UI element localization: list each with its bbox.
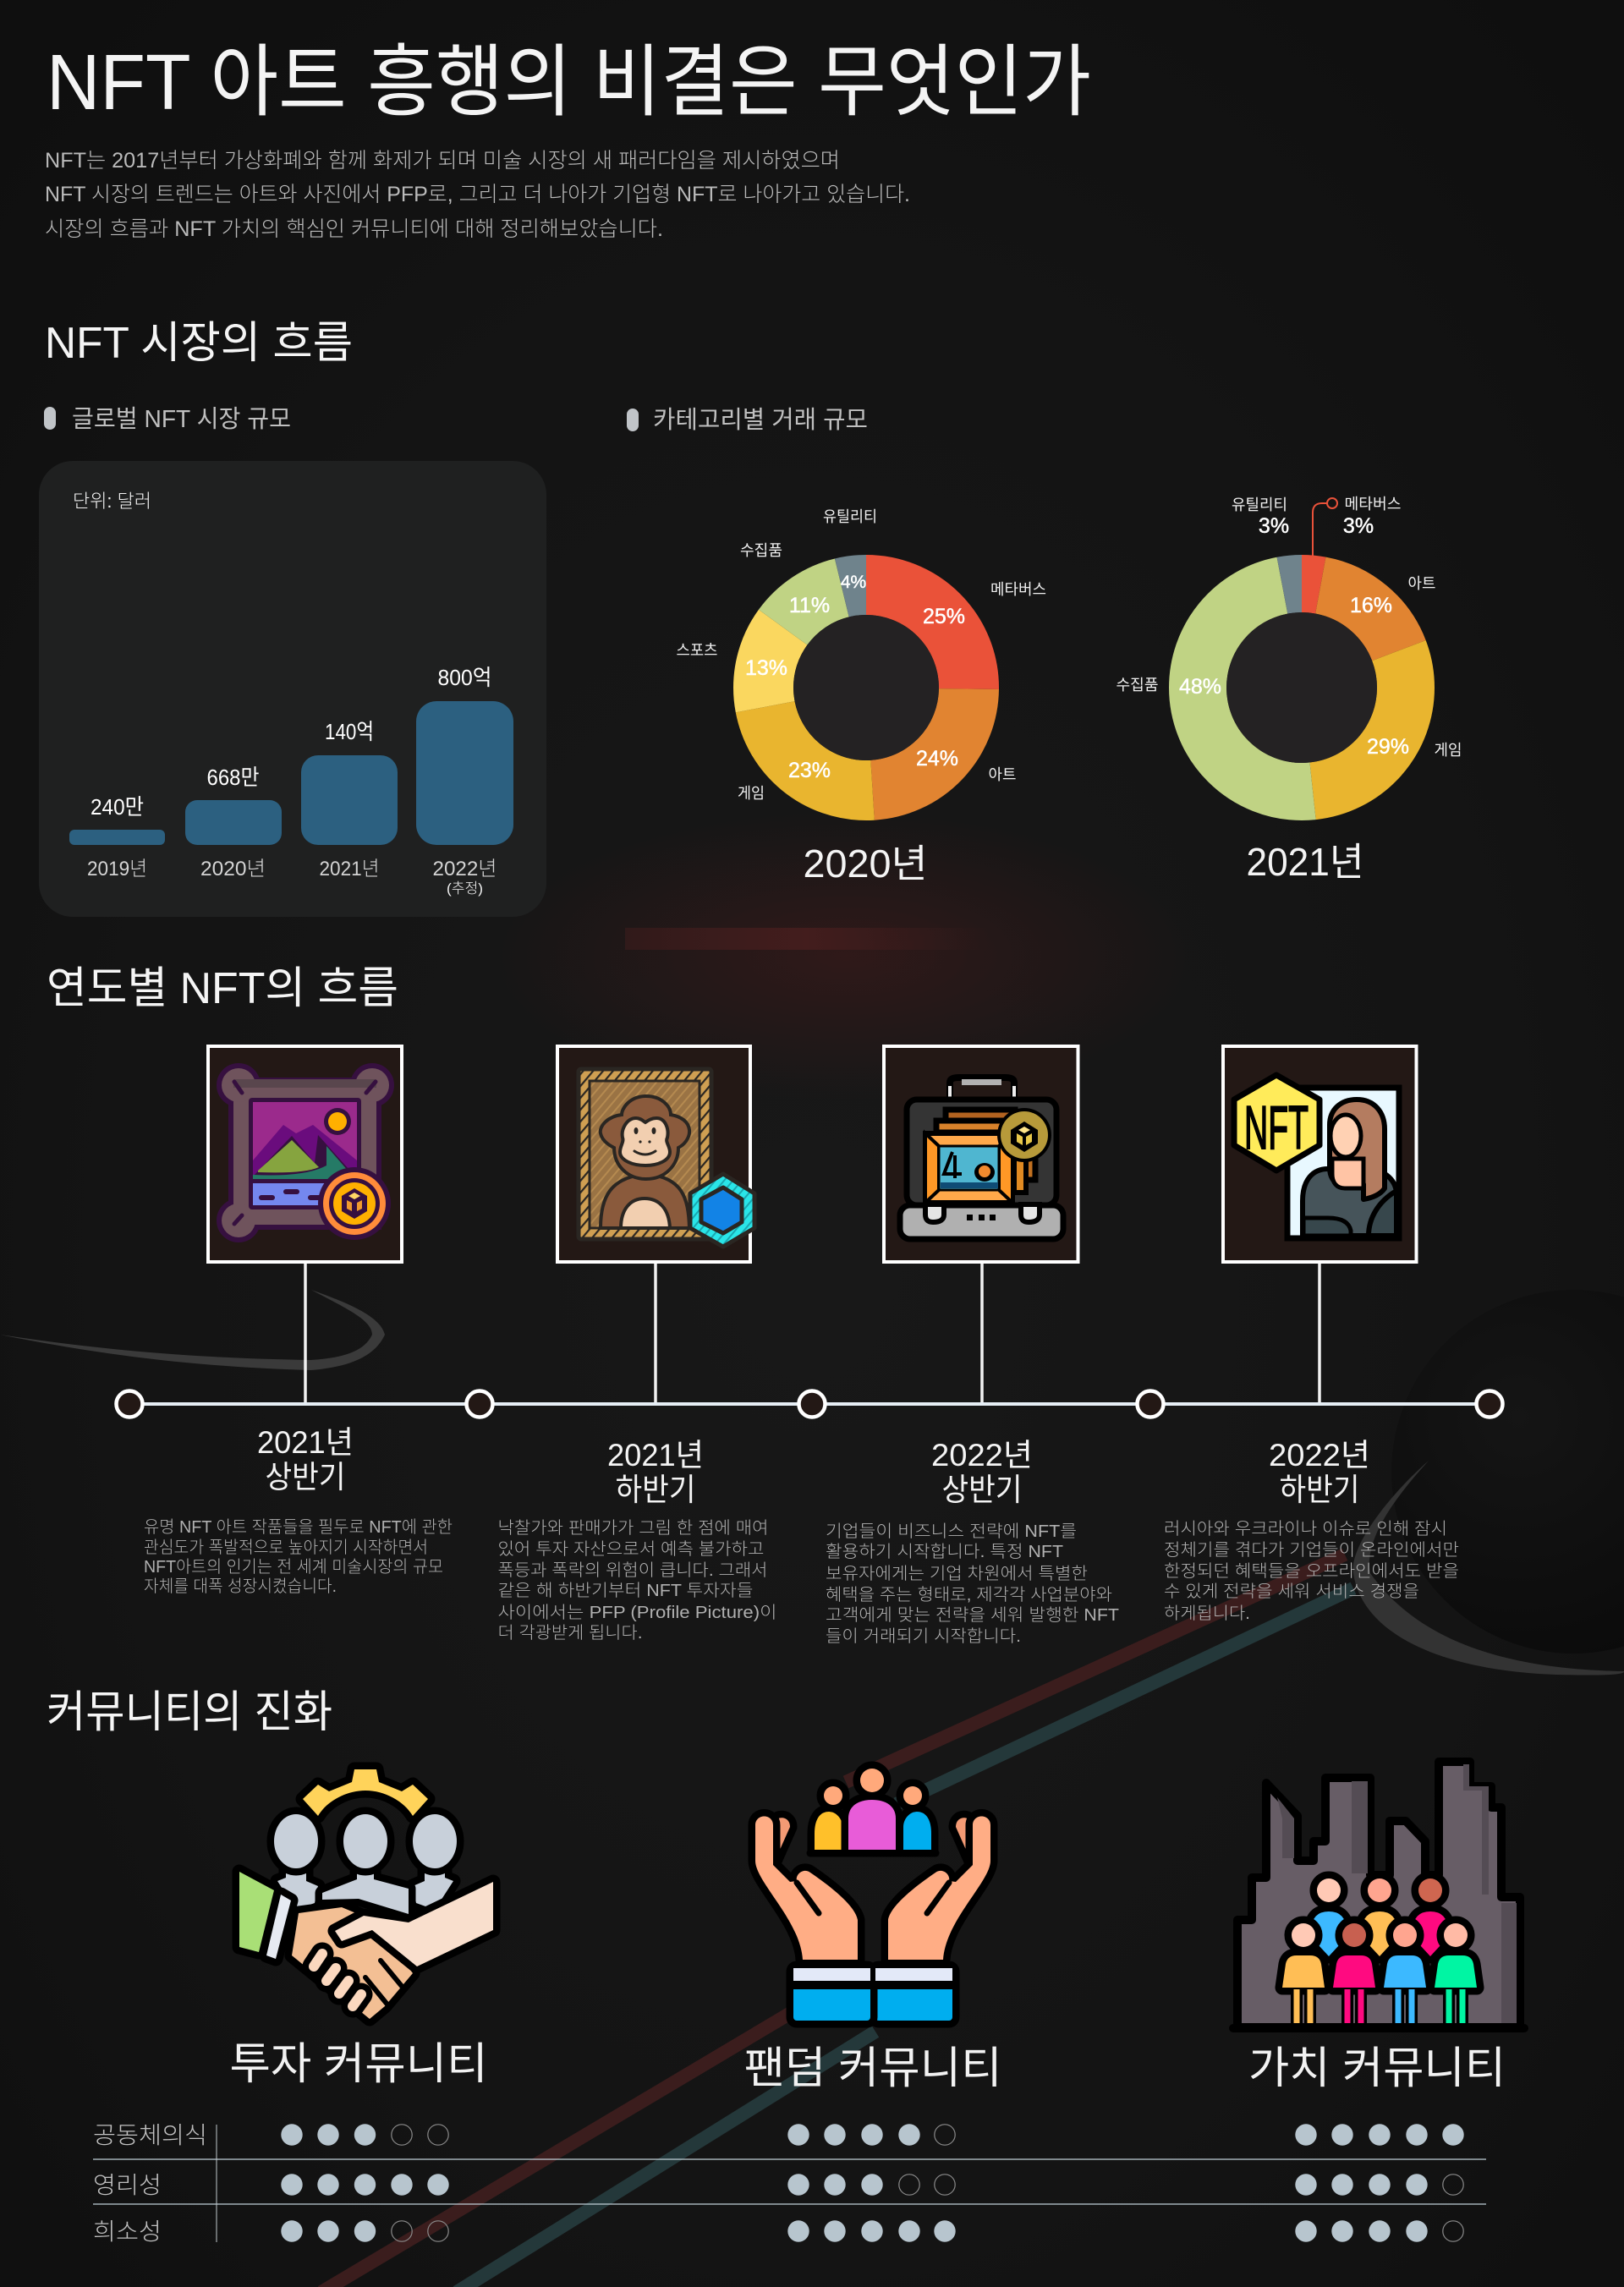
- intro paragraph: [45, 149, 910, 241]
- intro paragraph: NFT는 2017년부터 가상화폐와 함께 화제가 되며 미술 시장의 새 패러다임을 제시하였으며: [45, 149, 840, 173]
- donut chart: 2021: 수집품: [1116, 677, 1159, 694]
- donut chart: 2020: [677, 508, 1046, 886]
- timeline text: 2021 second half: 있어 투자 자산으로서 예측 불가하고: [497, 1539, 765, 1559]
- timeline text: 2021 second half: 낙찰가와 판매가가 그림 한 점에 매여: [497, 1518, 768, 1538]
- metaverse leader line: [1313, 498, 1337, 556]
- donut chart: 2021: 아트: [1407, 575, 1436, 592]
- timeline text: 2022 second half: 정체기를 겪다가 기업들이 온라인에서만: [1164, 1540, 1459, 1560]
- donut chart: 2020: 4%: [841, 573, 866, 592]
- timeline text: 2021 first half: 관심도가 폭발적으로 높아지기 시작하면서: [144, 1538, 428, 1557]
- icon: framed landscape NFT with coin: [208, 1046, 402, 1262]
- timeline text: 2022 second half: 러시아와 우크라이나 이슈로 인해 잠시: [1164, 1519, 1447, 1538]
- timeline text: 2022 first half: 활용하기 시작합니다. 특정 NFT: [826, 1542, 1063, 1561]
- timeline text: 2022 second half: 수 있게 전략을 세워 서비스 경쟁을: [1164, 1582, 1419, 1601]
- timeline text: 2021 second half: 폭등과 폭락의 위험이 큽니다. 그래서: [497, 1560, 768, 1580]
- timeline text: 2022 first half: 보유자에게는 기업 차원에서 특별한: [826, 1564, 1088, 1583]
- donut chart: 2020: 스포츠: [677, 642, 717, 659]
- comparison table: [93, 2122, 1486, 2245]
- rating dots: filled: [281, 2124, 1464, 2242]
- timeline text: 2021 second half: 하반기: [616, 1473, 695, 1507]
- donut chart: 2021: 29%: [1367, 735, 1409, 759]
- icon: briefcase with NFT art: [884, 1046, 1078, 1262]
- donut chart: 2021: [1116, 496, 1462, 884]
- timeline text: 2021 second half: [497, 1438, 776, 1643]
- donut chart: 2020: 메타버스: [990, 581, 1046, 598]
- timeline text: 2021 first half: 자체를 대폭 성장시켰습니다.: [144, 1577, 337, 1596]
- label: investment community: 투자 커뮤니티: [230, 2040, 487, 2089]
- timeline line and nodes: [117, 1264, 1502, 1418]
- heading: NFT market flow: NFT 시장의 흐름: [45, 319, 353, 368]
- comparison table: 공동체의식: [93, 2122, 207, 2148]
- title: NFT 아트 흥행의 비결은 무엇인가: [47, 38, 1091, 126]
- panel: bar chart of market size: 2020년: [200, 858, 266, 880]
- rating dots: empty: [392, 2125, 1463, 2241]
- timeline text: 2022 first half: 2022년: [931, 1438, 1033, 1473]
- panel: bar chart of market size: 2019년: [87, 858, 147, 880]
- label: value community: 가치 커뮤니티: [1248, 2044, 1506, 2093]
- panel: bar chart of market size: 140억: [325, 719, 374, 744]
- panel: bar chart of market size: 2021년: [320, 858, 379, 880]
- donut chart: 2021: 게임: [1435, 742, 1462, 759]
- donut chart: 2020: 23%: [788, 759, 831, 782]
- subheading: transactions by category: 카테고리별 거래 규모: [653, 407, 868, 434]
- timeline text: 2021 second half: 사이에서는 PFP (Profile Picture)이: [497, 1603, 776, 1622]
- intro paragraph: NFT 시장의 트렌드는 아트와 사진에서 PFP로, 그리고 더 나아가 기업형 NFT로 나아가고 있습니다.: [45, 183, 910, 206]
- donut chart: 2020: 11%: [789, 594, 830, 617]
- timeline text: 2022 first half: 고객에게 맞는 전략을 세워 발행한 NFT: [826, 1605, 1119, 1625]
- donut chart: 2021: 48%: [1179, 675, 1221, 699]
- timeline text: 2022 first half: [826, 1438, 1119, 1646]
- timeline text: 2021 second half: 같은 해 하반기부터 NFT 투자자들: [497, 1581, 753, 1600]
- heading: yearly NFT flow: 연도별 NFT의 흐름: [47, 964, 398, 1013]
- donut chart: 2021: 유틸리티: [1232, 496, 1287, 513]
- donut chart: 2021: 3%: [1259, 514, 1289, 538]
- panel: bar chart of market size: 240만: [91, 794, 144, 820]
- panel: bar chart of market size: 668만: [206, 765, 259, 790]
- timeline text: 2021 first half: 유명 NFT 아트 작품들을 필두로 NFT에 관한: [144, 1517, 453, 1537]
- intro paragraph: 시장의 흐름과 NFT 가치의 핵심인 커뮤니티에 대해 정리해보았습니다.: [45, 217, 663, 241]
- timeline text: 2022 second half: 하반기: [1279, 1473, 1360, 1507]
- icon: investment community handshake: [239, 1769, 493, 2019]
- timeline text: 2022 second half: 2022년: [1269, 1438, 1370, 1473]
- comparison table: 영리성: [93, 2172, 162, 2198]
- timeline text: 2021 first half: [144, 1425, 453, 1596]
- timeline text: 2022 first half: 혜택을 주는 형태로, 제각각 사업분야와: [826, 1585, 1112, 1604]
- icon: framed monkey PFP with hexagon badge: [557, 1046, 754, 1262]
- timeline text: 2021 first half: 상반기: [266, 1460, 345, 1495]
- label: fandom community: 팬덤 커뮤니티: [744, 2044, 1001, 2093]
- subheading: global NFT market size: 글로벌 NFT 시장 규모: [72, 406, 291, 433]
- timeline text: 2021 second half: 2021년: [607, 1438, 704, 1473]
- timeline text: 2022 second half: 한정되던 혜택들을 오프라인에서도 받을: [1164, 1561, 1459, 1581]
- panel: bar chart of market size: (추정): [447, 880, 483, 897]
- timeline text: 2022 first half: 상반기: [942, 1473, 1022, 1507]
- donut chart: 2020: 24%: [916, 747, 958, 771]
- timeline text: 2022 second half: [1164, 1438, 1459, 1623]
- icon: NFT portrait with hexagon tag: [1223, 1046, 1416, 1262]
- donut chart: 2020: 아트: [988, 766, 1017, 783]
- donut chart: 2021: 16%: [1350, 594, 1392, 617]
- panel: bar chart of market size: [39, 461, 546, 917]
- donut chart: 2020: 25%: [923, 605, 965, 628]
- donut chart: 2020: 수집품: [740, 542, 782, 559]
- icon: NFT portrait with hexagon tag: NFT: [1244, 1094, 1309, 1162]
- icon: value community ruined city and people: [1233, 1762, 1524, 2028]
- timeline text: 2021 first half: NFT아트의 인기는 전 세계 미술시장의 규모: [144, 1557, 443, 1577]
- timeline text: 2022 second half: 하게됩니다.: [1164, 1604, 1250, 1623]
- timeline text: 2022 first half: 들이 거래되기 시작합니다.: [826, 1626, 1021, 1646]
- heading: community evolution: 커뮤니티의 진화: [47, 1688, 332, 1737]
- donut chart: 2021: 2021년: [1247, 840, 1363, 884]
- timeline text: 2022 first half: 기업들이 비즈니스 전략에 NFT를: [826, 1522, 1077, 1541]
- donut chart: 2020: 2020년: [804, 842, 927, 886]
- panel: bar chart of market size: 단위: 달러: [73, 491, 151, 512]
- panel: bar chart of market size: 2022년: [433, 858, 497, 880]
- timeline text: 2021 second half: 더 각광받게 됩니다.: [497, 1623, 643, 1643]
- donut chart: 2020: 게임: [738, 785, 765, 802]
- comparison table: 희소성: [93, 2218, 162, 2245]
- timeline text: 2021 first half: 2021년: [257, 1425, 354, 1460]
- donut chart: 2020: 13%: [745, 656, 787, 680]
- donut chart: 2021: 메타버스: [1345, 496, 1401, 513]
- panel: bar chart of market size: 800억: [438, 665, 492, 690]
- icon: fandom community hands holding people: [755, 1769, 990, 2021]
- donut chart: 2020: 유틸리티: [823, 508, 877, 525]
- donut chart: 2021: 3%: [1343, 514, 1374, 538]
